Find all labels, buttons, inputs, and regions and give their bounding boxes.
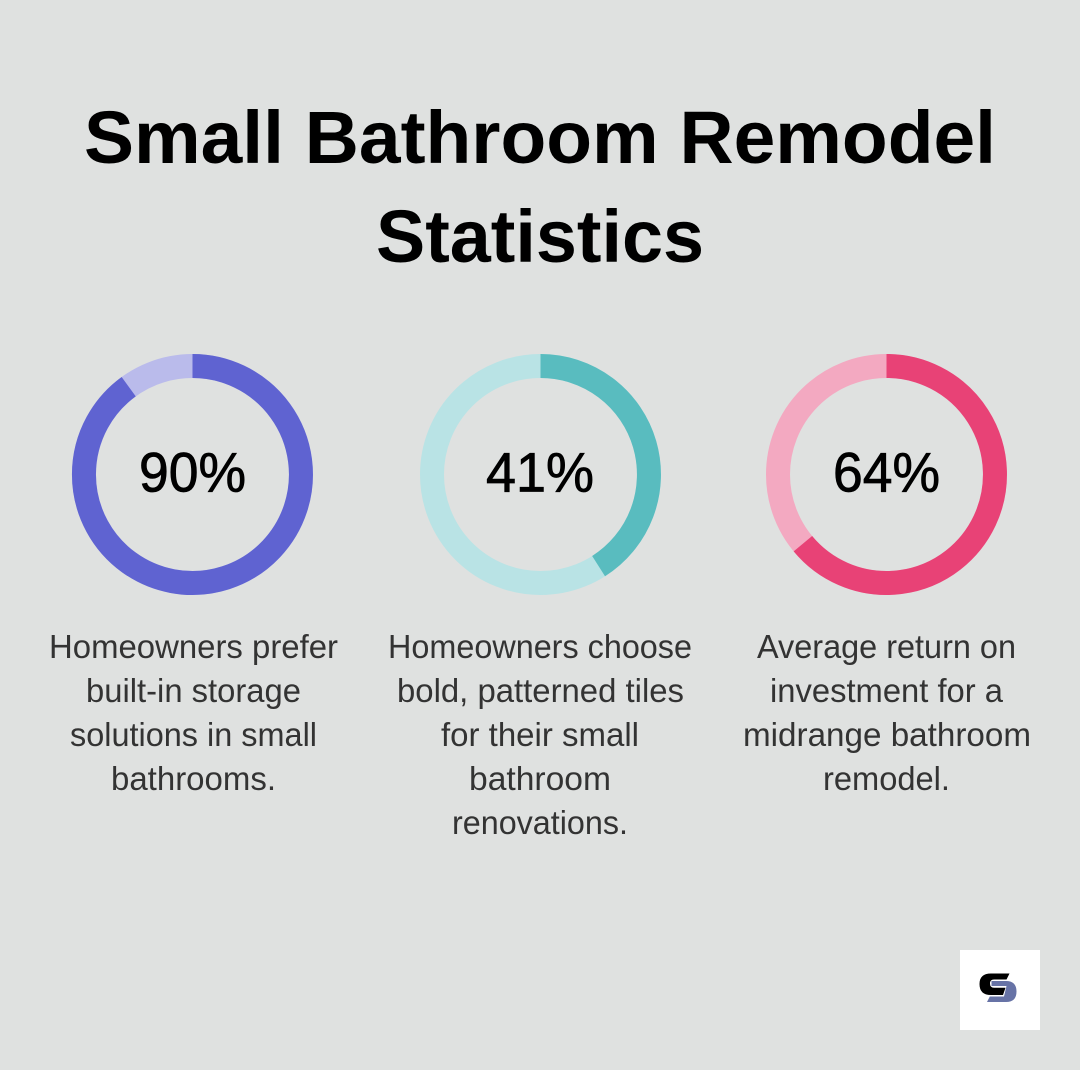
title: Small Bathroom Remodel <box>84 96 996 179</box>
description: patterned tiles: Homeowners choose <box>388 628 692 665</box>
panel: 90% built-in storage <box>49 366 338 797</box>
title <box>84 96 996 278</box>
title: Statistics <box>376 195 704 278</box>
description: built-in storage: Homeowners prefer <box>49 628 338 665</box>
description: patterned tiles: bold, patterned tiles <box>397 672 684 709</box>
panel: 41% patterned tiles <box>388 366 692 841</box>
description: return on investment: remodel. <box>823 760 950 797</box>
description: return on investment: investment for a <box>770 672 1004 709</box>
donut chart: 41% <box>432 366 649 583</box>
description: built-in storage: solutions in small <box>70 716 317 753</box>
value: 41%: 41% <box>486 440 594 504</box>
logo <box>960 950 1040 1030</box>
value: 90%: 90% <box>139 440 246 504</box>
donut chart: 64% <box>778 366 995 583</box>
description: patterned tiles: bathroom <box>469 760 611 797</box>
description: return on investment: Average return on <box>757 628 1016 665</box>
description: patterned tiles: for their small <box>441 716 639 753</box>
description: return on investment <box>743 628 1031 797</box>
description: built-in storage: built-in storage <box>86 672 301 709</box>
value: 64%: 64% <box>833 440 940 504</box>
description: built-in storage <box>49 628 338 797</box>
description: return on investment: midrange bathroom <box>743 716 1031 753</box>
panel: 64% return on investment <box>743 366 1031 797</box>
description: patterned tiles <box>388 628 692 841</box>
donut chart: 90% <box>84 366 301 583</box>
description: patterned tiles: renovations. <box>452 804 628 841</box>
description: built-in storage: bathrooms. <box>111 760 276 797</box>
